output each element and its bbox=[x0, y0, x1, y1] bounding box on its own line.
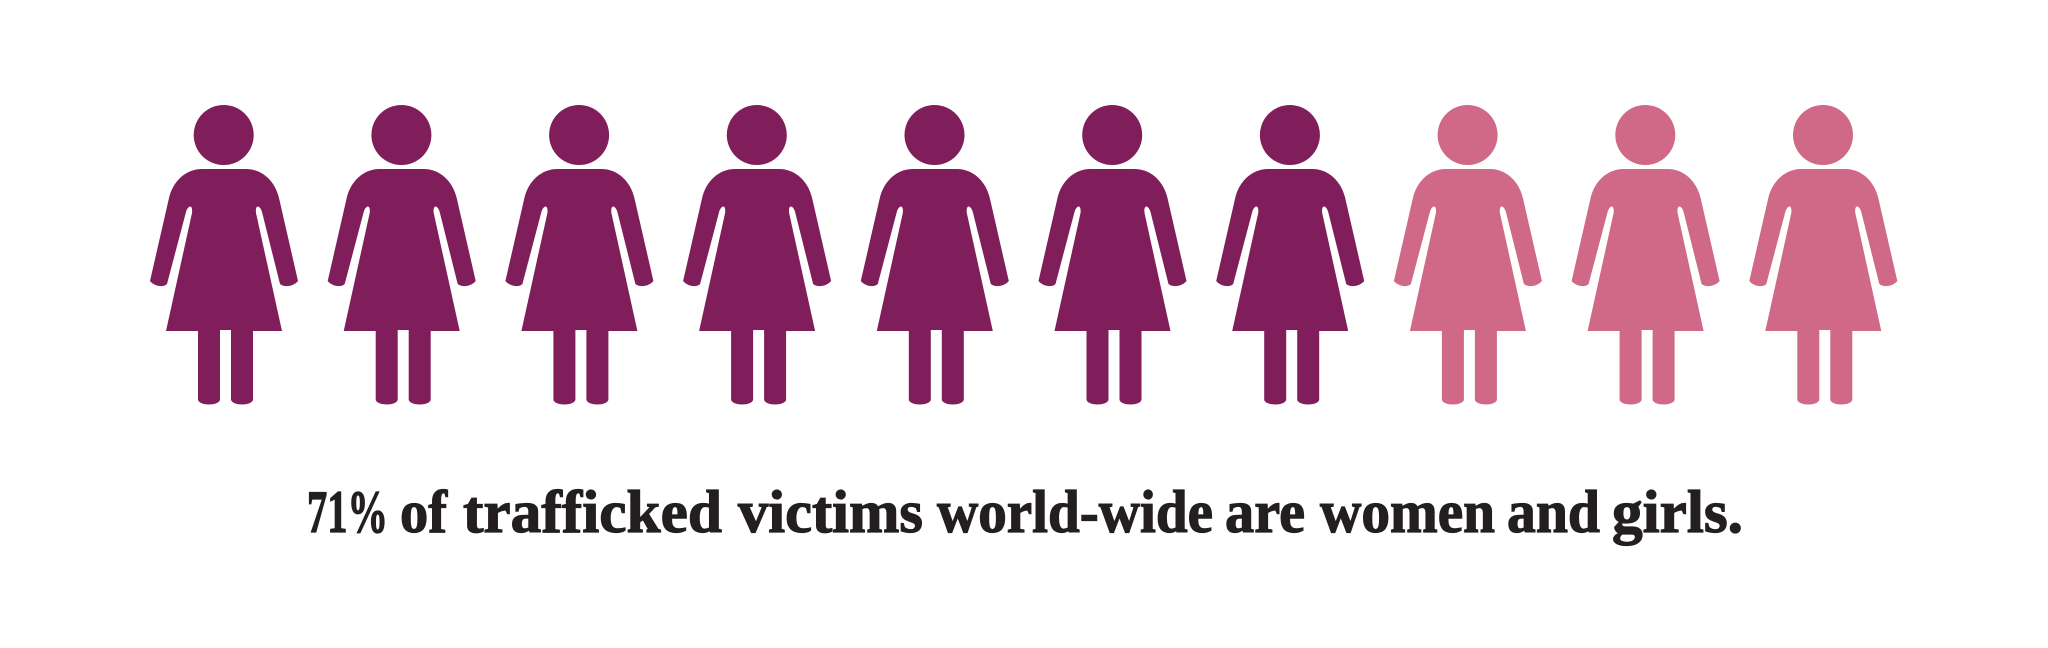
icon: woman 5 (dark) bbox=[861, 105, 1009, 404]
icon: woman 6 (dark) bbox=[1038, 105, 1186, 404]
icon: woman 9 (light) bbox=[1572, 105, 1720, 404]
icon: woman 7 (dark) bbox=[1216, 105, 1364, 404]
caption bbox=[307, 479, 1743, 545]
icon: woman 1 (dark) bbox=[150, 105, 298, 404]
caption: 71% bbox=[307, 479, 388, 545]
caption: victims bbox=[738, 479, 923, 545]
icon: woman 4 (dark) bbox=[683, 105, 831, 404]
caption: trafficked bbox=[463, 479, 722, 545]
icon: woman 2 (dark) bbox=[328, 105, 476, 404]
caption: are bbox=[1225, 479, 1305, 545]
caption: and bbox=[1507, 479, 1600, 545]
icon: woman 10 (light) bbox=[1749, 105, 1897, 404]
caption: girls. bbox=[1612, 479, 1743, 545]
caption: of bbox=[400, 479, 448, 545]
caption: world-wide bbox=[937, 479, 1213, 545]
pictogram row: 10 women, 7 dark and 3 light bbox=[150, 105, 1897, 404]
caption: women bbox=[1320, 479, 1495, 545]
icon: woman 8 (light) bbox=[1394, 105, 1542, 404]
icon: woman 3 (dark) bbox=[505, 105, 653, 404]
